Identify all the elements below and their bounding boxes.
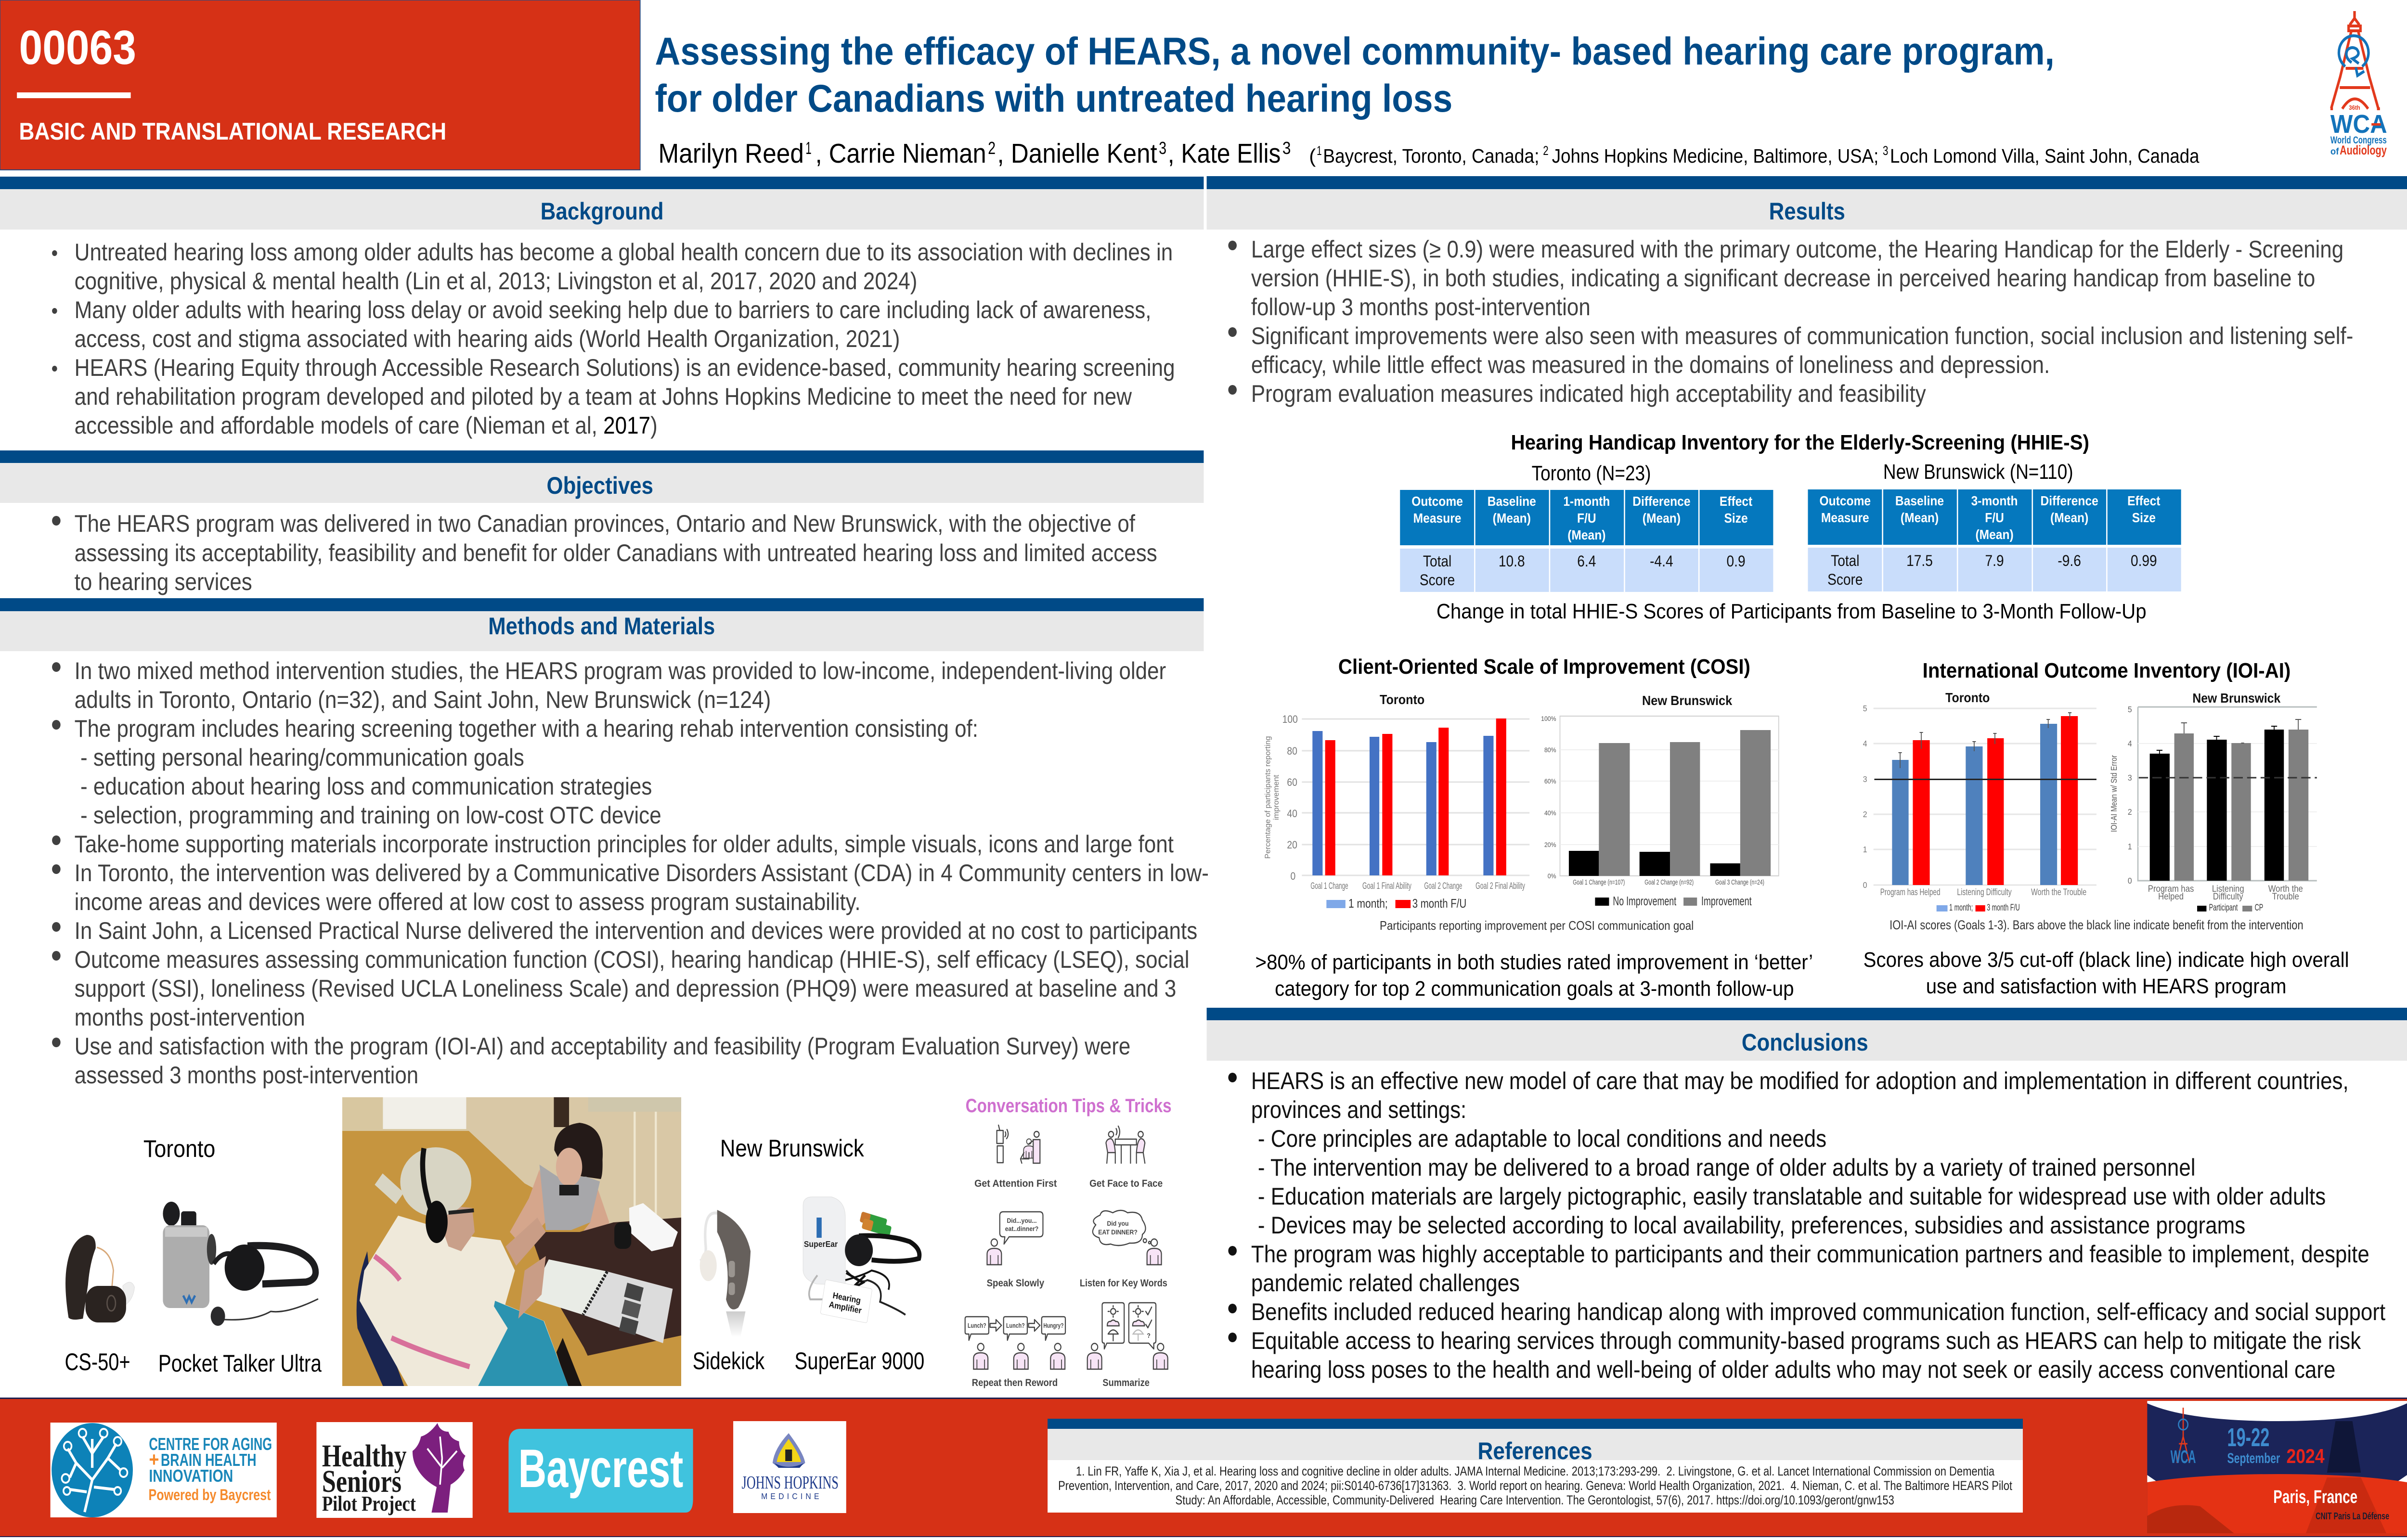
bar chart: IOI-AI New Brunswick: 5 [2128, 705, 2132, 714]
icon: get face to face [1089, 1126, 1163, 1189]
bar chart: COSI Toronto: Goal 1 Change [1310, 881, 1348, 891]
bullets: objectives text: assessing its acceptability, feasibility and benefit for older Canadians with untreated hearing loss and limited access [75, 539, 1157, 566]
bullets: objectives text: to hearing services [75, 568, 252, 595]
bar chart: IOI-AI Toronto: 2 [1863, 809, 1867, 819]
banner: congress Paris: WCA [2171, 1447, 2196, 1467]
bullets: methods text: - education about hearing loss and communication strategies [80, 772, 652, 800]
table: New Brunswick HHIE-S: (Mean) [2050, 510, 2088, 525]
icon: speak slowly: Did...you... [1007, 1217, 1037, 1224]
heading: IOI-AI: International Outcome Inventory (IOI-AI) [1923, 659, 2291, 682]
bar chart: COSI Toronto: 0 [1291, 871, 1295, 882]
icon: listen for key words: Did you [1107, 1219, 1129, 1227]
bar chart: IOI-AI Toronto: 0 [1863, 880, 1867, 890]
bullets: background text [52, 238, 1175, 439]
panel: background [0, 177, 1204, 439]
icon: listen for key words: Listen for Key Words [1080, 1278, 1167, 1289]
logo: Centre for Aging + Brain Health Innovation: INNOVATION [149, 1466, 233, 1486]
bullets: methods text: In Saint John, a Licensed Practical Nurse delivered the intervention and devices were provided at no cost to participants [75, 917, 1197, 944]
bullets: methods text: Take-home supporting materials incorporate instruction principles for older adults, simple visuals, icons and large font [75, 830, 1174, 858]
chart title: New Brunswick [1642, 693, 1732, 708]
callout: IOI-AI finding [1863, 948, 2349, 998]
table: New Brunswick HHIE-S: 0.99 [2131, 552, 2157, 569]
table: New Brunswick HHIE-S: 17.5 [1906, 552, 1933, 569]
table: Toronto HHIE-S: Difference [1632, 494, 1691, 509]
bullets: objectives text: The HEARS program was delivered in two Canadian provinces, Ontario and New Brunswick, with the objective of [75, 510, 1136, 537]
logo: Baycrest: Baycrest [518, 1439, 683, 1499]
table heading: Toronto (N=23) [1532, 462, 1651, 485]
bar chart: COSI New Brunswick [1541, 693, 1779, 908]
title: Assessing the efficacy of HEARS, a novel community- based hearing care program, [655, 30, 2055, 73]
panel: conversation tips [965, 1095, 1172, 1388]
bullets: results text: Significant improvements were also seen with measures of communication function, social inclusion and listening self- [1251, 322, 2353, 349]
bar chart: COSI Toronto: 40 [1287, 808, 1297, 820]
heading: objectives: Objectives [547, 472, 653, 499]
table: New Brunswick HHIE-S: Size [2132, 510, 2156, 525]
bar chart: IOI-AI New Brunswick: 3 [2128, 773, 2132, 783]
affiliations [1309, 144, 2200, 167]
table: New Brunswick HHIE-S: Outcome [1820, 493, 1871, 508]
table: New Brunswick HHIE-S: 7.9 [1985, 552, 2004, 569]
bar chart: IOI-AI Toronto: 1 month; [1949, 902, 1973, 912]
logo: Centre for Aging + Brain Health Innovation: Powered by Baycrest [148, 1487, 271, 1503]
bullets: conclusions text: - Education materials are largely pictographic, easily translatable and suitable for widespread use with older adults [1258, 1182, 2326, 1210]
icon: summarize: Summarize [1102, 1377, 1150, 1388]
affiliations: 3 [1883, 144, 1888, 158]
bullets: conclusions text: Equitable access to hearing services through community-based programs such as HEARS can help to mitigate the risk [1251, 1327, 2361, 1354]
banner: congress Paris: September [2227, 1450, 2280, 1466]
logo: Centre for Aging + Brain Health Innovation [51, 1423, 277, 1517]
bar chart: IOI-AI New Brunswick: 4 [2128, 739, 2132, 748]
authors: 2 [988, 139, 996, 158]
table: Toronto HHIE-S: Outcome [1411, 494, 1463, 509]
bullets: conclusions text: provinces and settings: [1251, 1096, 1466, 1123]
table: New Brunswick HHIE-S: F/U [1985, 510, 2004, 525]
category: BASIC AND TRANSLATIONAL RESEARCH [19, 117, 446, 145]
authors: , Kate Ellis [1168, 138, 1281, 169]
reference list: Study: An Affordable, Accessible, Community-Delivered Hearing Care Intervention. The Gerontologist, 57(6), 2017. https://doi.org/10.1093/geront/gnw153 [1176, 1493, 1894, 1507]
bar chart: IOI-AI New Brunswick: 2 [2128, 807, 2132, 817]
heading: references: References [1478, 1437, 1592, 1464]
bullets: background text: and rehabilitation program developed and piloted by a team at Johns Hopkins Medicine to meet the need for new [75, 383, 1132, 410]
caption: COSI: Participants reporting improvement per COSI communication goal [1380, 919, 1694, 933]
image: SuperEar 9000: Amplifier [828, 1299, 863, 1316]
bar chart: IOI-AI New Brunswick: Program has [2148, 884, 2194, 894]
table heading: New Brunswick (N=110) [1883, 460, 2073, 484]
bar chart: COSI New Brunswick: 100% [1541, 715, 1556, 722]
bullets: background text: Untreated hearing loss among older adults has become a global health concern due to its association with declines in [75, 238, 1173, 266]
bar chart: COSI New Brunswick: 80% [1544, 746, 1556, 754]
bullets: results text: Large effect sizes (≥ 0.9) were measured with the primary outcome, the Hearing Handicap for the Elderly - Screening [1251, 235, 2343, 263]
bar chart: IOI-AI New Brunswick: Participant [2209, 902, 2238, 912]
authors: , Carrie Nieman [815, 138, 986, 169]
icon: speak slowly [987, 1212, 1044, 1289]
table: Toronto HHIE-S: Measure [1413, 511, 1461, 526]
bar chart: IOI-AI Toronto: 3 [1863, 774, 1867, 784]
bullets: methods text: months post-intervention [75, 1003, 305, 1031]
bullets: conclusions text: pandemic related challenges [1251, 1269, 1520, 1296]
table: Toronto HHIE-S: 10.8 [1499, 553, 1525, 570]
table: New Brunswick HHIE-S [1808, 460, 2181, 591]
logo: Healthy Seniors Pilot Project: Pilot Project [322, 1492, 416, 1515]
banner: congress Paris: CNIT Paris La Défense [2316, 1511, 2389, 1521]
title [655, 30, 2055, 120]
panel: results [1207, 176, 2407, 407]
heading: COSI: Client-Oriented Scale of Improvement (COSI) [1338, 655, 1750, 679]
bar chart: COSI Toronto: 100 [1282, 714, 1298, 725]
table: New Brunswick HHIE-S: -9.6 [2058, 552, 2081, 569]
logo: Centre for Aging + Brain Health Innovation: CENTRE FOR AGING [149, 1435, 272, 1454]
bar chart: COSI New Brunswick: No Improvement [1613, 895, 1676, 908]
heading: methods: Methods and Materials [488, 612, 715, 640]
bar chart: IOI-AI New Brunswick: Trouble [2272, 891, 2299, 901]
bullets: background text: accessible and affordable models of care (Nieman et al, 2017) [75, 411, 658, 439]
panel: methods and materials [0, 598, 1209, 1089]
image: Pocket Talker Ultra [163, 1202, 318, 1326]
image: CS-50+ hearing aid [65, 1235, 134, 1322]
bullets: background text: Many older adults with hearing loss delay or avoid seeking help due to barriers to care including lack of awareness, [75, 296, 1151, 323]
authors: 3 [1282, 139, 1291, 158]
logo: Centre for Aging + Brain Health Innovation: + [149, 1449, 159, 1471]
bar chart: COSI Toronto: Goal 2 Change [1424, 881, 1462, 891]
icon: repeat then reword: Lunch? [1006, 1322, 1025, 1329]
logo: Healthy Seniors Pilot Project: Healthy [322, 1439, 407, 1474]
table: New Brunswick HHIE-S: Total [1831, 552, 1860, 569]
table: Toronto HHIE-S: 1-month [1563, 494, 1610, 509]
heading: conversation tips: Conversation Tips & Tricks [966, 1095, 1172, 1116]
label: New Brunswick devices: New Brunswick [720, 1134, 864, 1162]
table: Toronto HHIE-S: Baseline [1488, 494, 1536, 509]
bar chart: IOI-AI New Brunswick: Difficulty [2213, 891, 2243, 901]
bullets: results text: efficacy, while little effect was measured in the domains of loneliness and depression. [1251, 351, 2050, 378]
reference list [1058, 1464, 2012, 1507]
panel: references [1048, 1419, 2023, 1513]
callout: COSI finding [1255, 950, 1813, 1001]
bullets: methods text: The program includes hearing screening together with a hearing rehab intervention consisting of: [75, 715, 978, 742]
bar chart: COSI New Brunswick: Goal 2 Change (n=92) [1644, 878, 1694, 886]
bar chart: IOI-AI Toronto: 3 month F/U [1987, 902, 2020, 912]
bullets: methods text: Outcome measures assessing communication function (COSI), hearing handicap (HHIE-S), self efficacy (LSEQ), social [75, 946, 1190, 973]
icon: repeat then reword [965, 1317, 1065, 1388]
image: SuperEar 9000 [803, 1197, 919, 1323]
bullets: methods text: support (SSI), loneliness (Revised UCLA Loneliness Scale) and depression (PHQ9) were measured at baseline and 3 [75, 975, 1176, 1002]
callout: IOI-AI finding: use and satisfaction with HEARS program [1926, 975, 2287, 998]
bar chart: IOI-AI Toronto: 1 [1863, 845, 1867, 854]
icon: get attention first [974, 1125, 1057, 1189]
reference list: Prevention, Intervention, and Care, 2017, 2020 and 2024; pii:S0140-6736[17]31363. 3. World report on hearing. Geneva: World Health Organization, 2021. 4. Nieman, C. et al. The Baltimore HEARS Pilot [1058, 1479, 2012, 1493]
bar chart: COSI Toronto: improvement [1272, 775, 1281, 820]
bullets: methods text: income areas and devices were offered at low cost to assess program sustainability. [75, 888, 861, 915]
banner: congress Paris: Paris, France [2273, 1487, 2357, 1507]
bar chart: COSI New Brunswick: 60% [1544, 777, 1556, 785]
bar chart: IOI-AI New Brunswick: 1 [2128, 842, 2132, 851]
abstract number: 00063 [19, 21, 136, 74]
image: Sidekick hearing aid [700, 1210, 751, 1337]
affiliations: 1 [1317, 144, 1322, 158]
table: Toronto HHIE-S: Effect [1720, 494, 1752, 509]
logo: World Congress of Audiology: World Congress [2330, 135, 2387, 146]
batteries [858, 1211, 893, 1237]
bullets: conclusions text: - The intervention may be delivered to a broad range of older adults by a variety of trained personnel [1258, 1154, 2196, 1181]
bar chart: IOI-AI New Brunswick: Helped [2158, 891, 2184, 901]
icon: summarize [1087, 1303, 1168, 1388]
woman facilitator [510, 1123, 609, 1251]
table: Toronto HHIE-S: 0.9 [1727, 553, 1746, 570]
bar chart: COSI New Brunswick: 0% [1548, 872, 1556, 880]
table: New Brunswick HHIE-S: Effect [2127, 493, 2161, 508]
logo: Johns Hopkins Medicine: MEDICINE [761, 1491, 819, 1501]
bar chart: IOI-AI New Brunswick: Listening [2212, 884, 2244, 894]
icon: listen for key words [1080, 1210, 1167, 1289]
icon: listen for key words: EAT DINNER? [1098, 1228, 1138, 1236]
chart title: Toronto [1945, 690, 1990, 705]
table: Toronto HHIE-S: Size [1724, 511, 1748, 526]
table: Toronto HHIE-S: (Mean) [1567, 527, 1605, 542]
logo: Centre for Aging + Brain Health Innovation: BRAIN HEALTH [161, 1450, 257, 1470]
bar chart: IOI-AI Toronto: 4 [1863, 739, 1867, 748]
heading: HHIE-S: Hearing Handicap Inventory for the Elderly-Screening (HHIE-S) [1511, 431, 2089, 454]
bar chart: COSI New Brunswick: Goal 1 Change (n=107) [1573, 878, 1625, 886]
bullets: conclusions text: - Devices may be selected according to local availability, preferences, subsidies and assistance programs [1258, 1211, 2245, 1239]
bullets: results text: Program evaluation measures indicated high acceptability and feasibility [1251, 380, 1926, 407]
chart title: New Brunswick [2192, 691, 2281, 706]
authors: 1 [805, 139, 812, 158]
logo: World Congress of Audiology: Audiology [2340, 143, 2387, 157]
heading: conclusions: Conclusions [1742, 1028, 1868, 1056]
bar chart: COSI Toronto: 80 [1287, 745, 1297, 757]
logo: World Congress of Audiology: WCA [2330, 109, 2387, 139]
photo: participant and facilitator [342, 1097, 681, 1386]
heading: results: Results [1769, 197, 1845, 225]
label: Sidekick: Sidekick [693, 1347, 765, 1374]
older participant [357, 1147, 568, 1386]
banner: congress Paris: 19-22 [2227, 1423, 2269, 1452]
table: Toronto HHIE-S: -4.4 [1650, 553, 1673, 570]
bar chart: COSI Toronto: 20 [1287, 839, 1297, 851]
logo: World Congress of Audiology: of [2330, 146, 2339, 156]
affiliations: Baycrest, Toronto, Canada; [1323, 145, 1539, 167]
bar chart: IOI-AI New Brunswick [2109, 691, 2317, 912]
table: New Brunswick HHIE-S: Baseline [1895, 493, 1944, 508]
bullets: methods text: In two mixed method intervention studies, the HEARS program was provided to low-income, independent-living older [75, 657, 1166, 684]
bullets: results text: version (HHIE-S), in both studies, indicating a significant decrease in perceived hearing handicap from baseline to [1251, 264, 2315, 292]
label: CS-50+: CS-50+ [65, 1348, 130, 1375]
logo: World Congress of Audiology: 36th [2349, 104, 2360, 111]
bullets: conclusions text: Benefits included reduced hearing handicap along with improved communication function, self-efficacy and social support [1251, 1298, 2385, 1325]
bar chart: COSI Toronto [1263, 692, 1529, 911]
callout: COSI finding: category for top 2 communication goals at 3-month follow-up [1275, 977, 1794, 1001]
table: Toronto HHIE-S: (Mean) [1493, 511, 1531, 526]
affiliations: Loch Lomond Villa, Saint John, Canada [1890, 145, 2200, 167]
bar chart: IOI-AI New Brunswick: IOI-AI Mean w/ Std Error [2109, 755, 2119, 832]
bar chart: COSI Toronto: Percentage of participants reporting [1263, 736, 1272, 859]
table: Toronto HHIE-S: Total [1423, 553, 1451, 570]
affiliations: ( [1309, 145, 1316, 167]
logo: Healthy Seniors Pilot Project [316, 1422, 473, 1518]
icon: summarize: ? [1147, 1332, 1151, 1339]
header: abstract id block [0, 0, 640, 170]
affiliations: Johns Hopkins Medicine, Baltimore, USA; [1552, 145, 1878, 167]
table: Toronto HHIE-S: 6.4 [1577, 553, 1596, 570]
bullets: methods text [52, 657, 1209, 1089]
bar chart: COSI Toronto: 60 [1287, 777, 1297, 788]
bar chart: COSI Toronto: 1 month; [1348, 897, 1388, 911]
image: SuperEar 9000: Hearing [832, 1291, 862, 1306]
bullets: background text: cognitive, physical & mental health (Lin et al, 2013; Livingston et al, 2017, 2020 and 2024) [75, 267, 917, 295]
label: SuperEar 9000: SuperEar 9000 [795, 1347, 924, 1374]
banner: congress Paris: 2024 [2287, 1445, 2325, 1468]
bar chart: IOI-AI Toronto [1863, 690, 2096, 912]
icon: speak slowly: Speak Slowly [987, 1278, 1044, 1289]
logo: Healthy Seniors Pilot Project: Seniors [322, 1464, 401, 1499]
bullets: conclusions text: hearing loss poses to the health and well-being of older adults who may not seek or easily access conventional care [1251, 1356, 2335, 1383]
table: Toronto HHIE-S: Score [1420, 572, 1455, 589]
table: Toronto HHIE-S [1400, 462, 1773, 592]
bullets: conclusions text: - Core principles are adaptable to local conditions and needs [1258, 1125, 1826, 1152]
bar chart: IOI-AI New Brunswick: 0 [2128, 876, 2132, 886]
table: Toronto HHIE-S: F/U [1577, 511, 1596, 526]
bar chart: IOI-AI New Brunswick: Worth the [2268, 884, 2303, 894]
caption: HHIE-S change: Change in total HHIE-S Scores of Participants from Baseline to 3-Month Follow-Up [1436, 600, 2147, 623]
table: New Brunswick HHIE-S: Measure [1821, 510, 1869, 525]
bullets: conclusions text: The program was highly acceptable to participants and their communication partners and feasible to implement, despite [1251, 1240, 2369, 1268]
authors: , Danielle Kent [997, 138, 1157, 169]
bar chart: IOI-AI Toronto: Worth the Trouble [2031, 887, 2086, 897]
image: SuperEar 9000: SuperEar [804, 1239, 838, 1249]
icon: repeat then reword: Lunch? [968, 1322, 986, 1329]
bullets: conclusions text: HEARS is an effective new model of care that may be modified for adoption and implementation in different countries, [1251, 1067, 2349, 1094]
bar chart: IOI-AI Toronto: 5 [1863, 704, 1867, 713]
logo: World Congress of Audiology [2330, 11, 2387, 157]
logo: Baycrest [508, 1429, 693, 1513]
table: New Brunswick HHIE-S: (Mean) [1901, 510, 1939, 525]
reference list: 1. Lin FR, Yaffe K, Xia J, et al. Hearing loss and cognitive decline in older adults. JAMA Internal Medicine. 2013;173:293-299. 2. Livingstone, G. et al. Lancet International Commission on Dementia [1076, 1464, 1995, 1478]
icon: repeat then reword: Hungry? [1043, 1322, 1064, 1329]
bar chart: IOI-AI Toronto: Listening Difficulty [1957, 887, 2012, 897]
authors [659, 138, 1291, 169]
table: New Brunswick HHIE-S: Score [1827, 571, 1863, 588]
bar chart: COSI New Brunswick: 40% [1544, 809, 1556, 817]
footer band [0, 1398, 2407, 1537]
label: Pocket Talker Ultra: Pocket Talker Ultra [158, 1349, 322, 1377]
heading: background: Background [541, 197, 664, 225]
label: Toronto devices: Toronto [143, 1135, 215, 1162]
caption: IOI-AI: IOI-AI scores (Goals 1-3). Bars above the black line indicate benefit from the intervention [1889, 918, 2303, 932]
affiliations: 2 [1543, 144, 1549, 158]
table: New Brunswick HHIE-S: Difference [2041, 493, 2098, 508]
banner: congress Paris [2147, 1401, 2407, 1533]
bullets: background text: HEARS (Hearing Equity through Accessible Research Solutions) is an evidence-based, community hearing screening [75, 354, 1175, 381]
bar chart: COSI New Brunswick: 20% [1544, 841, 1556, 848]
bar chart: COSI Toronto: Goal 2 Final Ability [1475, 881, 1525, 891]
table: New Brunswick HHIE-S: (Mean) [1975, 527, 2014, 542]
icon: get attention first: Get Attention First [974, 1178, 1057, 1189]
booklet [529, 1259, 673, 1343]
callout: COSI finding: >80% of participants in both studies rated improvement in ‘better’ [1255, 950, 1813, 974]
bullets: methods text: - selection, programming and training on low-cost OTC device [80, 801, 661, 829]
table: Toronto HHIE-S: (Mean) [1643, 511, 1681, 526]
authors: Marilyn Reed [659, 138, 804, 169]
bar chart: IOI-AI Toronto: Program has Helped [1880, 887, 1941, 897]
bar chart: COSI New Brunswick: Improvement [1701, 895, 1752, 908]
bullets: conclusions text [1228, 1067, 2385, 1383]
bullets: methods text: In Toronto, the intervention was delivered by a Communicative Disorders Assistant (CDA) in 4 Community centers in low- [75, 859, 1209, 886]
bullets: methods text: adults in Toronto, Ontario (n=32), and Saint John, New Brunswick (n=124) [75, 686, 771, 713]
bar chart: COSI New Brunswick: Goal 3 Change (n=24) [1715, 878, 1764, 886]
icon: get face to face: Get Face to Face [1089, 1178, 1163, 1189]
logo: Johns Hopkins Medicine [733, 1421, 846, 1513]
title: for older Canadians with untreated hearing loss [655, 77, 1452, 120]
icon: speak slowly: eat..dinner? [1005, 1225, 1038, 1232]
bullets: background text: access, cost and stigma associated with hearing aids (World Health Organization, 2021) [75, 325, 900, 352]
table: New Brunswick HHIE-S: 3-month [1971, 493, 2018, 508]
bullets: results text [1228, 235, 2353, 407]
chart title: Toronto [1380, 692, 1424, 707]
logo: Johns Hopkins Medicine: JOHNS HOPKINS [742, 1472, 839, 1492]
bar chart: IOI-AI New Brunswick: CP [2255, 902, 2263, 912]
panel: objectives [0, 450, 1204, 595]
callout: IOI-AI finding: Scores above 3/5 cut-off (black line) indicate high overall [1863, 948, 2349, 972]
panel: conclusions [1207, 1008, 2407, 1383]
bullets: methods text: assessed 3 months post-intervention [75, 1061, 418, 1089]
bar chart: COSI Toronto: 3 month F/U [1412, 897, 1466, 911]
bullets: objectives text [52, 510, 1157, 595]
bullets: results text: follow-up 3 months post-intervention [1251, 293, 1591, 321]
bullets: methods text: - setting personal hearing/communication goals [80, 744, 524, 771]
icon: repeat then reword: Repeat then Reword [972, 1377, 1058, 1388]
bar chart: COSI Toronto: Goal 1 Final Ability [1362, 881, 1411, 891]
authors: 3 [1159, 139, 1166, 158]
bullets: methods text: Use and satisfaction with the program (IOI-AI) and acceptability and feasibility (Program Evaluation Survey) were [75, 1032, 1130, 1060]
